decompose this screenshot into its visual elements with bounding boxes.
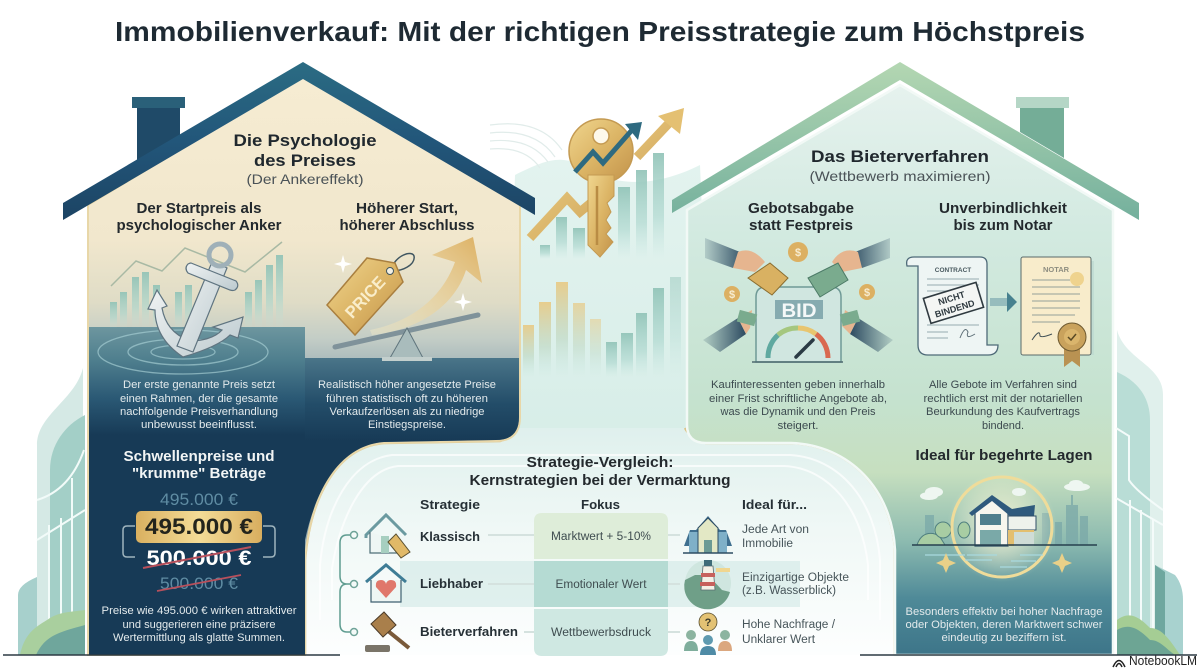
clouds xyxy=(920,480,1090,500)
subheading: non-binding: bis zum Notar xyxy=(954,218,1053,234)
illustration: anchor in water xyxy=(98,242,283,374)
title: Immobilienverkauf: Mit der richtigen Preisstrategie zum Höchstpreis xyxy=(115,16,1085,47)
subheading: higher start xyxy=(340,201,474,234)
heading: (Der Ankereffekt) xyxy=(246,171,364,187)
house wall xyxy=(88,76,520,655)
illustration: price tag on seesaw: PRICE xyxy=(341,273,389,322)
panel: left house, psychology of price xyxy=(63,62,535,655)
heading: Kernstrategien bei der Vermarktung xyxy=(470,473,730,489)
illustration: house in golden ring xyxy=(912,472,1097,582)
connector lines xyxy=(488,535,680,632)
skyline xyxy=(925,495,1088,545)
row: Klassisch: Marktwert + 5-10% xyxy=(551,531,651,543)
subheading: threshold prices: "krumme" Beträge xyxy=(132,466,266,482)
text block: threshold prices: und suggerieren eine präzisere xyxy=(122,619,276,631)
icon: lighthouse xyxy=(684,560,731,609)
text block: non-binding: Beurkundung des Kaufvertrags xyxy=(926,406,1081,418)
roof xyxy=(63,62,535,220)
subheading: non-binding: Unverbindlichkeit xyxy=(939,201,1067,217)
highlighted price xyxy=(136,511,262,543)
text block: threshold prices xyxy=(102,605,297,644)
table headers: Fokus xyxy=(581,497,620,512)
trees xyxy=(917,522,970,545)
heading xyxy=(810,147,990,184)
bracket nodes xyxy=(350,532,358,636)
row: Bieterverfahren: Bieterverfahren xyxy=(420,624,518,639)
notary document: NOTAR xyxy=(1043,265,1070,274)
text block: non-binding xyxy=(924,379,1082,432)
bracket connector xyxy=(340,535,351,632)
illustration: contract to notary xyxy=(907,257,1094,367)
brackets xyxy=(123,526,275,557)
arrow head: navy xyxy=(625,122,642,140)
hands and envelope xyxy=(733,250,862,334)
icon: house with heart xyxy=(366,565,406,602)
text block: bids: einer Frist schriftliche Angebote ab, xyxy=(709,393,887,405)
centre panel: strategy comparison xyxy=(305,428,895,656)
panel: right house, bidding procedure xyxy=(672,62,1139,655)
gauge xyxy=(768,328,828,358)
text block: anchor: nachfolgende Preisverhandlung xyxy=(120,406,278,418)
heading: Die Psychologie xyxy=(234,131,376,150)
row: Bieterverfahren: Wettbewerbsdruck xyxy=(551,627,651,639)
footer logo: NotebookLM: NotebookLM xyxy=(1129,654,1197,668)
row: Klassisch: Jede Art von xyxy=(742,524,809,536)
text block: anchor: unbewusst beeinflusst. xyxy=(141,419,257,431)
contract: CONTRACT xyxy=(935,267,971,274)
rising arrow xyxy=(370,237,482,335)
arrow head: gold xyxy=(658,108,684,134)
subheading: bids: statt Festpreis xyxy=(749,218,853,234)
roof xyxy=(672,62,1139,220)
text block: non-binding: bindend. xyxy=(982,420,1024,432)
sparkles xyxy=(334,255,472,311)
stamp xyxy=(923,282,984,323)
text block: non-binding: Alle Gebote im Verfahren sind xyxy=(929,379,1077,391)
price comparison: 500.000 € xyxy=(146,547,252,570)
subheading: bids xyxy=(748,201,854,234)
subheading: anchor: Der Startpreis als xyxy=(136,201,262,217)
price comparison: 500.000 € xyxy=(160,574,239,593)
anchor xyxy=(148,262,243,357)
icon: blue house xyxy=(683,516,733,553)
text block: bids: Kaufinteressenten geben innerhalb xyxy=(711,379,885,391)
house xyxy=(969,495,1036,546)
row: Bieterverfahren: Unklarer Wert xyxy=(742,634,816,646)
subheading: anchor xyxy=(116,201,282,234)
heading: (Wettbewerb maximieren) xyxy=(810,168,990,184)
house wall xyxy=(687,85,1113,655)
row: Liebhaber: Liebhaber xyxy=(420,576,483,591)
row: Liebhaber xyxy=(366,560,849,609)
notary document xyxy=(1021,257,1094,367)
subheading: threshold prices xyxy=(124,449,274,482)
contract xyxy=(907,257,998,355)
centre graphic: key, arrows and bar charts xyxy=(523,108,684,377)
row: Bieterverfahren xyxy=(365,612,836,655)
subheading: desirable locations: Ideal für begehrte Lagen xyxy=(916,448,1092,464)
heading: des Preises xyxy=(254,151,356,170)
heading xyxy=(234,131,376,187)
panel background xyxy=(305,428,895,655)
stamp: BINDEND xyxy=(934,298,976,320)
arrow: gold rising xyxy=(530,120,672,238)
bar chart behind anchor xyxy=(110,255,283,328)
text block: higher start: Einstiegspreise. xyxy=(368,419,446,431)
illustration: bid box with hands: $ xyxy=(729,289,735,301)
row: Bieterverfahren: Hohe Nachfrage / xyxy=(742,619,836,631)
icon: group with question mark xyxy=(684,613,732,655)
text block: non-binding: rechtlich erst mit der notariellen xyxy=(924,393,1082,405)
table headers: Ideal für... xyxy=(742,497,807,512)
icon: golden key xyxy=(569,119,633,257)
background: soft centre landscape xyxy=(500,160,720,640)
text block: threshold prices: Preise wie 495.000 € wirken attraktiver xyxy=(102,605,297,617)
text block: desirable locations: eindeutig zu beziffern ist. xyxy=(942,632,1066,644)
heading: Das Bieterverfahren xyxy=(811,147,989,166)
dark water band: right xyxy=(305,358,519,540)
table row band xyxy=(400,561,800,607)
heading: Strategie-Vergleich: xyxy=(526,455,674,471)
table headers: Strategie xyxy=(420,497,480,512)
text block: anchor: Der erste genannte Preis setzt xyxy=(123,379,275,391)
table headers xyxy=(420,497,807,512)
text block: bids: steigert. xyxy=(778,420,818,432)
subheading: higher start: höherer Abschluss xyxy=(340,218,474,234)
row: Klassisch: Immobilie xyxy=(742,538,793,550)
illustration: bid box with hands: $ xyxy=(864,287,870,299)
text block: desirable locations: Besonders effektiv bei hoher Nachfrage xyxy=(906,606,1102,618)
bar chart: lower xyxy=(523,277,681,377)
subheading: higher start: Höherer Start, xyxy=(356,201,458,217)
tag string xyxy=(391,254,414,270)
row: Liebhaber: Emotionaler Wert xyxy=(556,579,647,591)
icon: house with price tag xyxy=(366,515,410,558)
text block: bids: was die Dynamik und den Preis xyxy=(719,406,876,418)
text block: higher start: Verkaufzerlösen als zu niedrige xyxy=(330,406,484,418)
water ripples xyxy=(98,330,268,374)
subheading: non-binding xyxy=(939,201,1067,234)
text block: desirable locations xyxy=(906,606,1103,644)
ground and water lines xyxy=(912,544,1097,546)
arrow: navy trend xyxy=(575,130,632,172)
golden ring xyxy=(952,477,1052,577)
sparkles xyxy=(936,553,1072,573)
row: Liebhaber: (z.B. Wasserblick) xyxy=(742,585,836,597)
text block: anchor: einen Rahmen, der die gesamte xyxy=(120,393,278,405)
row: Klassisch xyxy=(366,515,809,558)
background: left glass building xyxy=(18,368,85,655)
illustration: bid box with hands: $ xyxy=(795,247,801,259)
price comparison xyxy=(123,490,275,593)
price comparison: 495.000 € xyxy=(145,514,253,539)
glow xyxy=(947,472,1057,582)
text block: threshold prices: Wertermittlung als glatte Summen. xyxy=(113,632,285,644)
arms xyxy=(703,238,746,352)
text block: desirable locations: oder Objekten, deren Marktwert schwer xyxy=(906,619,1103,631)
subheading: bids: Gebotsabgabe xyxy=(748,201,854,217)
illustration: bid box with hands xyxy=(703,238,893,362)
coins xyxy=(724,242,875,302)
chimney xyxy=(1016,97,1069,158)
heading xyxy=(470,455,730,489)
text block: bids xyxy=(709,379,887,432)
illustration: price tag on seesaw xyxy=(327,237,482,361)
focus column xyxy=(534,513,668,656)
row: Liebhaber: Einzigartige Objekte xyxy=(742,572,849,584)
bid box xyxy=(756,287,841,362)
seal xyxy=(1064,345,1080,367)
bar chart: upper xyxy=(540,153,664,259)
seesaw plank xyxy=(335,315,478,347)
arrow xyxy=(990,292,1017,312)
stamp: NICHT xyxy=(937,289,967,307)
text block: anchor xyxy=(120,379,278,431)
dark water band: left xyxy=(89,327,305,655)
subheading: threshold prices: Schwellenpreise und xyxy=(124,449,274,465)
subheading: anchor: psychologischer Anker xyxy=(116,218,282,234)
row: Klassisch: Klassisch xyxy=(420,529,480,544)
icon: gavel xyxy=(365,612,409,652)
bid label: BID xyxy=(782,301,816,322)
chimney xyxy=(132,97,185,162)
icon: group with question mark: ? xyxy=(705,617,712,629)
text block: higher start: Realistisch höher angesetzte Preise xyxy=(318,379,496,391)
text block: higher start xyxy=(318,379,496,431)
text block: higher start: führen statistisch oft zu höheren xyxy=(326,393,488,405)
anchor ring xyxy=(209,244,231,266)
seesaw base xyxy=(390,328,423,358)
background: right glass building xyxy=(1116,330,1183,655)
line chart xyxy=(111,242,282,286)
price tag xyxy=(327,258,403,335)
price comparison: 495.000 € xyxy=(160,490,239,509)
